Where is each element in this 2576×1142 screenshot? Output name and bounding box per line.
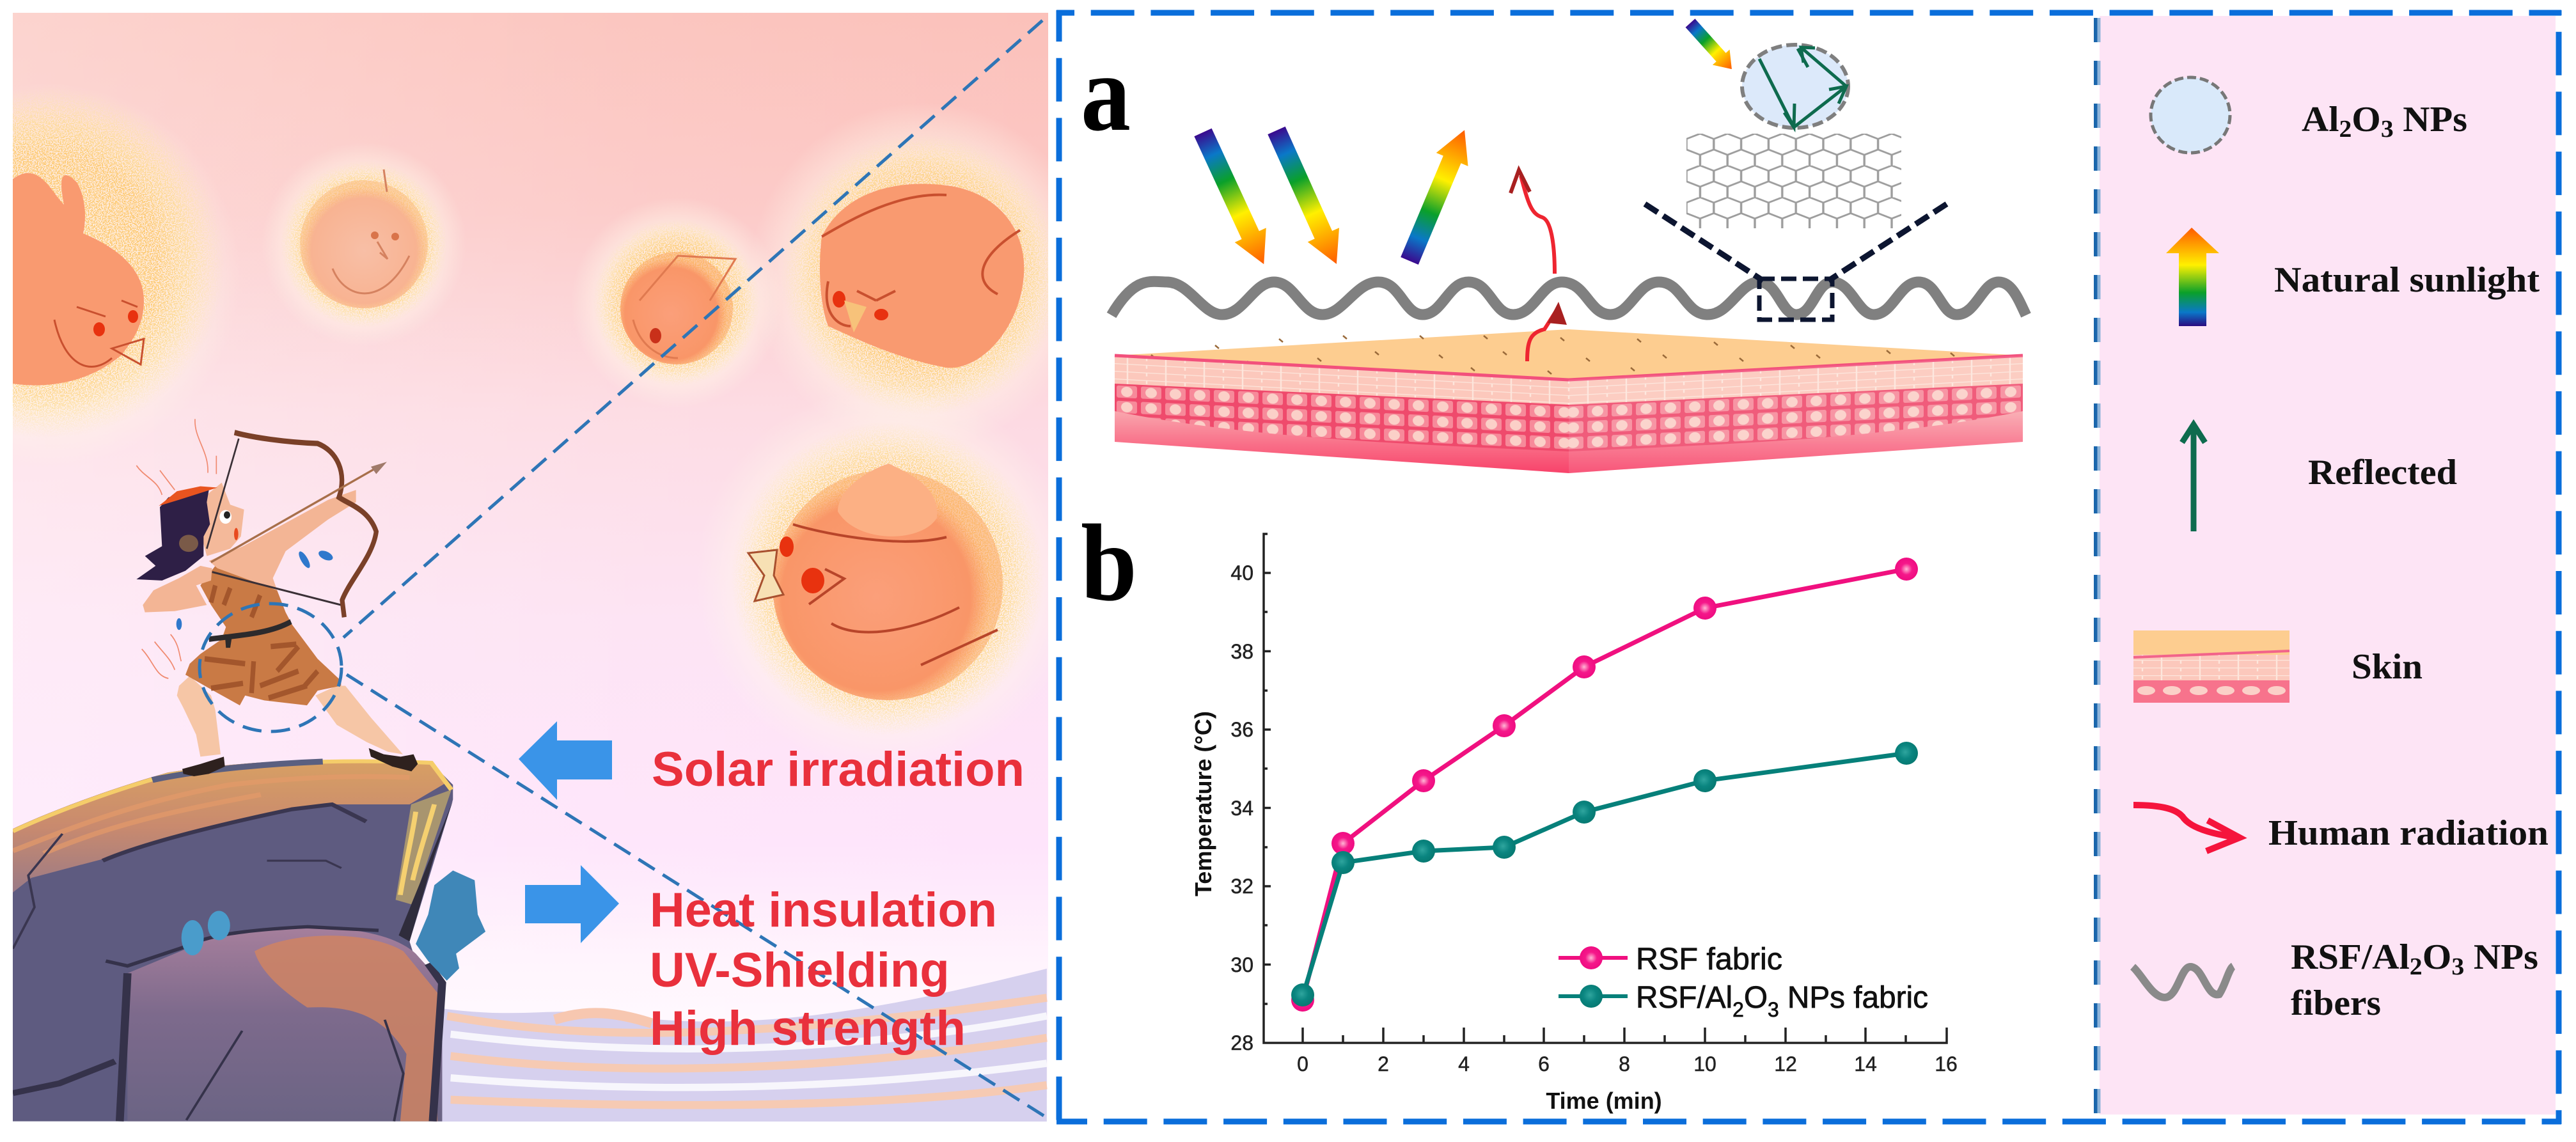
label: Al2O3 NPs: NPs bbox=[2394, 100, 2467, 139]
arrow: reflected sunlight bbox=[1394, 123, 1480, 267]
series: RSF/Al2O3 NPs fabric bbox=[1291, 742, 1918, 1006]
arrow: properties bbox=[525, 865, 619, 943]
y axis labels: 30 bbox=[1230, 953, 1253, 976]
label: properties: Heat insulation bbox=[650, 883, 997, 937]
skin block bbox=[1115, 329, 2023, 473]
arrow: incoming sunlight 1 bbox=[1187, 125, 1280, 271]
label: RSF/Al2O3 NPs fibers: RSF/Al bbox=[2291, 937, 2404, 977]
chart legend: RSF/Al bbox=[1636, 981, 1733, 1015]
heading: panel b: b bbox=[1081, 503, 1137, 624]
dashed magnifier circle bbox=[200, 604, 342, 731]
icon: natural sunlight arrow bbox=[2166, 228, 2219, 326]
arrow: inset sunlight bbox=[1682, 15, 1740, 77]
label: skin: Skin bbox=[2352, 647, 2423, 687]
label: RSF/Al2O3 NPs fibers: 3 bbox=[2451, 953, 2464, 980]
y axis labels: 40 bbox=[1230, 561, 1253, 584]
label: RSF/Al2O3 NPs fibers bbox=[2291, 937, 2538, 1023]
label: RSF/Al2O3 NPs fibers: fibers bbox=[2291, 983, 2381, 1023]
x axis labels: 16 bbox=[1935, 1052, 1958, 1076]
inset: nanotube bbox=[1686, 134, 1901, 228]
label: Al2O3 NPs: O bbox=[2352, 100, 2381, 139]
legend panel bbox=[2133, 77, 2549, 1023]
x axis labels: 10 bbox=[1693, 1052, 1716, 1076]
fiber wave bbox=[1111, 281, 2026, 315]
series: RSF fabric bbox=[1291, 558, 1918, 1012]
dashed leader lines bbox=[343, 20, 1047, 1118]
x axis labels: 0 bbox=[1297, 1052, 1308, 1076]
y axis labels: 28 bbox=[1230, 1031, 1253, 1054]
chart legend: 3 bbox=[1768, 998, 1779, 1021]
chart: temperature over time bbox=[1190, 534, 1958, 1114]
label: properties bbox=[650, 883, 997, 1056]
icon: Al2O3 nanoparticle bbox=[2151, 77, 2230, 153]
label: human radiation: Human radiation bbox=[2268, 813, 2549, 853]
icon: sun bird upper right bbox=[769, 116, 1048, 417]
label: natural sunlight: Natural sunlight bbox=[2274, 260, 2540, 300]
chart legend: 2 bbox=[1732, 998, 1744, 1021]
illustration: cliff rock bbox=[13, 760, 485, 1122]
icon: fiber wave bbox=[2133, 966, 2233, 997]
icon: sun bird large bbox=[732, 422, 1047, 734]
label: properties: High strength bbox=[650, 1001, 966, 1056]
label: RSF/Al2O3 NPs fibers: 2 bbox=[2410, 953, 2423, 980]
panel: legend background bbox=[2100, 16, 2556, 1115]
label: solar irradiation: Solar irradiation bbox=[652, 742, 1025, 797]
archer figure bbox=[136, 419, 418, 776]
icon: human radiation arrow bbox=[2133, 805, 2240, 851]
label: Al2O3 NPs: 3 bbox=[2381, 116, 2394, 143]
x axis labels: 6 bbox=[1538, 1052, 1550, 1076]
inset: dashed zoom lines bbox=[1645, 204, 1947, 320]
arrow: radiation from skin bbox=[1527, 302, 1567, 361]
icon: sun bird small bbox=[583, 207, 769, 393]
x axis labels: 4 bbox=[1458, 1052, 1470, 1076]
chart legend bbox=[1559, 943, 1928, 1021]
panel: dashed frame bbox=[1056, 10, 2561, 1124]
inset: nanoparticle with reflections bbox=[1742, 45, 1848, 128]
arrow: incoming sunlight 2 bbox=[1261, 123, 1352, 271]
diagram: fabric on skin bbox=[1111, 15, 2026, 473]
panel: illustration of archer and solar birds bbox=[0, 13, 1095, 1122]
x axis labels bbox=[1297, 1052, 1958, 1076]
icon: skin swatch bbox=[2133, 630, 2289, 703]
chart legend: NPs fabric bbox=[1779, 981, 1928, 1015]
icon: reflected arrow bbox=[2182, 425, 2205, 531]
arrow: solar irradiation bbox=[519, 721, 612, 800]
label: RSF/Al2O3 NPs fibers: O bbox=[2423, 937, 2451, 977]
x axis labels: 2 bbox=[1378, 1052, 1389, 1076]
x axis labels: 14 bbox=[1854, 1052, 1877, 1076]
illustration: water and hills bbox=[434, 969, 1047, 1122]
label: properties: UV-Shielding bbox=[650, 943, 950, 997]
y axis labels: 34 bbox=[1230, 797, 1253, 820]
y axis labels: 36 bbox=[1230, 718, 1253, 741]
x axis labels: 12 bbox=[1774, 1052, 1797, 1076]
label: reflected: Reflected bbox=[2308, 453, 2457, 492]
axis title: temperature: Temperature (°C) bbox=[1190, 711, 1216, 896]
y axis labels: 32 bbox=[1230, 875, 1253, 898]
label: Al2O3 NPs: Al bbox=[2302, 100, 2337, 139]
chart legend: O bbox=[1744, 981, 1768, 1015]
icon: sun bird far left bbox=[13, 95, 219, 434]
axis title: time: Time (min) bbox=[1546, 1088, 1662, 1114]
x axis labels: 8 bbox=[1619, 1052, 1630, 1076]
chart legend: RSF fabric bbox=[1636, 943, 1782, 976]
y axis labels: 38 bbox=[1230, 640, 1253, 663]
y axis labels bbox=[1230, 561, 1253, 1054]
axes and ticks bbox=[1264, 534, 1947, 1043]
icon: sun bird pale bbox=[274, 152, 455, 332]
label: RSF/Al2O3 NPs fibers: NPs bbox=[2464, 937, 2538, 977]
arrow: radiation above fabric bbox=[1511, 170, 1555, 274]
label: Al2O3 NPs: 2 bbox=[2339, 116, 2352, 143]
heading: panel a: a bbox=[1081, 33, 1131, 154]
